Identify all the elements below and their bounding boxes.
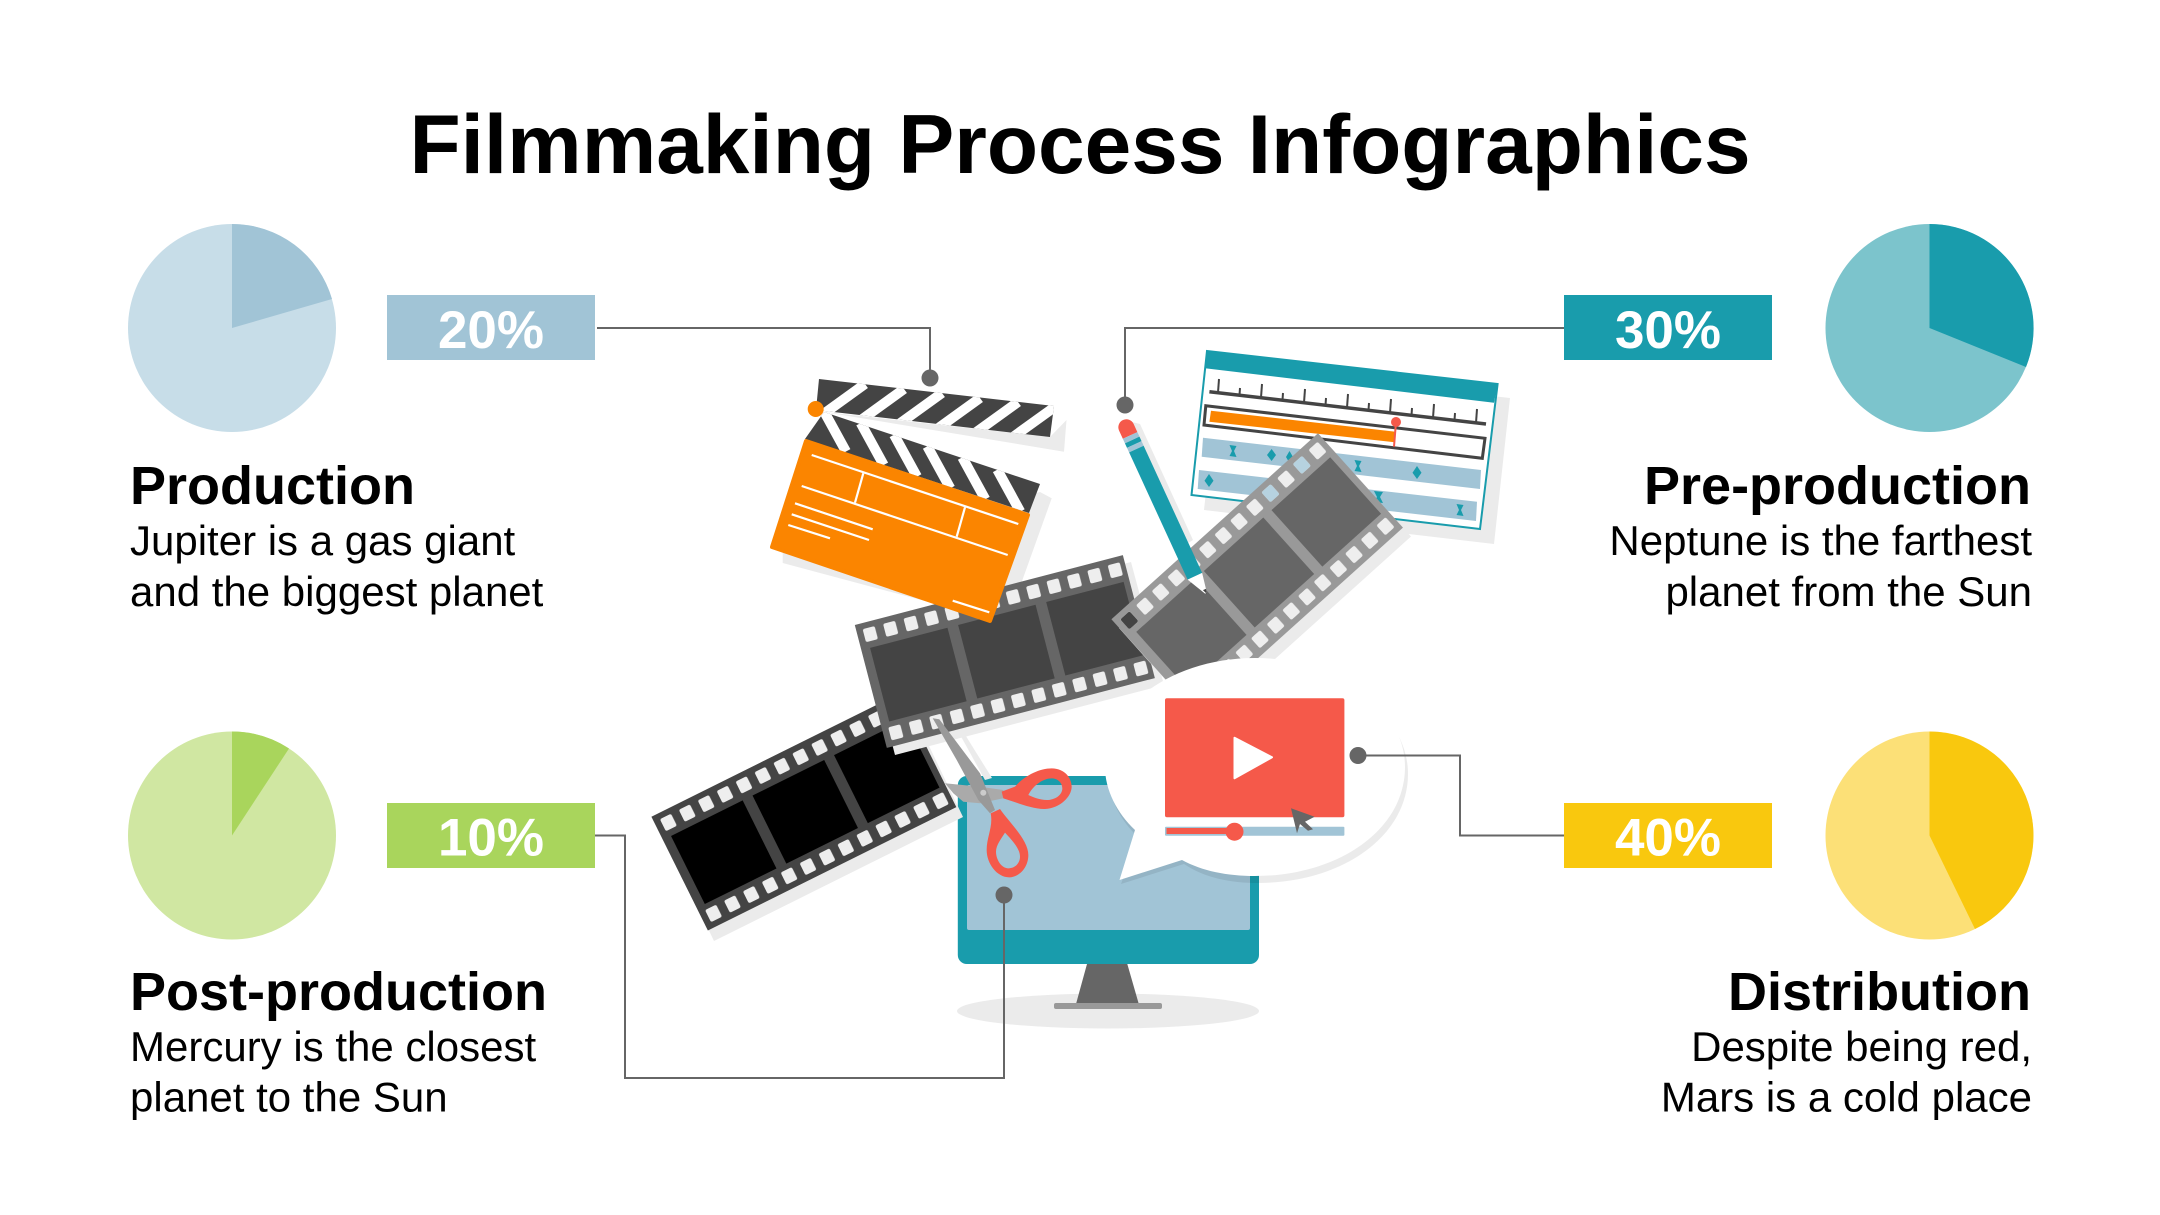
percent label: 10% bbox=[387, 803, 595, 868]
text: production description: Jupiter is a gas giant bbox=[130, 517, 516, 564]
panel: post-production bbox=[128, 732, 595, 1121]
connector: pre-production bbox=[1116, 328, 1564, 414]
illustration: film clapperboard bbox=[772, 379, 1056, 621]
pie chart: distribution 40% bbox=[1826, 732, 2034, 940]
panel: distribution bbox=[1564, 732, 2034, 1121]
pie chart: production 20% bbox=[128, 224, 336, 432]
heading: post-production: Post-production bbox=[130, 962, 547, 1022]
pie chart: pre-production 30% bbox=[1826, 224, 2034, 432]
icon: play button bbox=[1234, 738, 1272, 778]
text: pre-production description: planet from the Sun bbox=[1665, 568, 2032, 615]
percent label: 10%: 10% bbox=[438, 808, 544, 868]
connector: post-production bbox=[595, 836, 1012, 1078]
title: Filmmaking Process Infographics bbox=[409, 97, 1751, 191]
icon: mouse cursor bbox=[1291, 808, 1315, 833]
heading: pre-production: Pre-production bbox=[1644, 456, 2031, 516]
percent label: 20%: 20% bbox=[438, 301, 544, 360]
text: pre-production description: Neptune is the farthest bbox=[1609, 517, 2032, 564]
video player screen bbox=[1165, 698, 1344, 817]
text: post-production description: planet to the Sun bbox=[130, 1074, 448, 1121]
percent label: 20% bbox=[387, 295, 595, 360]
percent label: 30% bbox=[1564, 295, 1772, 360]
percent label: 40%: 40% bbox=[1615, 808, 1721, 868]
illustration: black film strip bbox=[651, 693, 963, 941]
illustration: pencil bbox=[1116, 417, 1211, 599]
percent label: 30%: 30% bbox=[1615, 301, 1721, 360]
text: post-production description: Mercury is the closest bbox=[130, 1023, 536, 1070]
connector: production bbox=[597, 328, 938, 386]
illustration: speech bubble with video player bbox=[1105, 658, 1408, 884]
connector: distribution bbox=[1350, 747, 1564, 836]
pencil shadow bbox=[1128, 421, 1193, 545]
clapperboard shadow bbox=[783, 412, 1066, 623]
illustration: schedule timeline panel bbox=[1192, 351, 1510, 544]
text: distribution description: Mars is a cold place bbox=[1661, 1074, 2032, 1121]
illustration: computer monitor bbox=[957, 776, 1259, 1028]
panel: pre-production bbox=[1564, 224, 2034, 615]
text: production description: and the biggest planet bbox=[130, 568, 544, 615]
video progress bar bbox=[1165, 823, 1344, 841]
percent label: 40% bbox=[1564, 803, 1772, 868]
pie chart: post-production 10% bbox=[128, 732, 336, 940]
heading: distribution: Distribution bbox=[1728, 962, 2031, 1022]
illustration: dark grey film strip bbox=[855, 555, 1164, 755]
illustration: scissors bbox=[933, 718, 1072, 877]
text: distribution description: Despite being red, bbox=[1691, 1023, 2032, 1070]
heading: production: Production bbox=[130, 456, 415, 516]
illustration: light grey film strip bbox=[1111, 433, 1411, 723]
panel: production bbox=[128, 224, 595, 615]
